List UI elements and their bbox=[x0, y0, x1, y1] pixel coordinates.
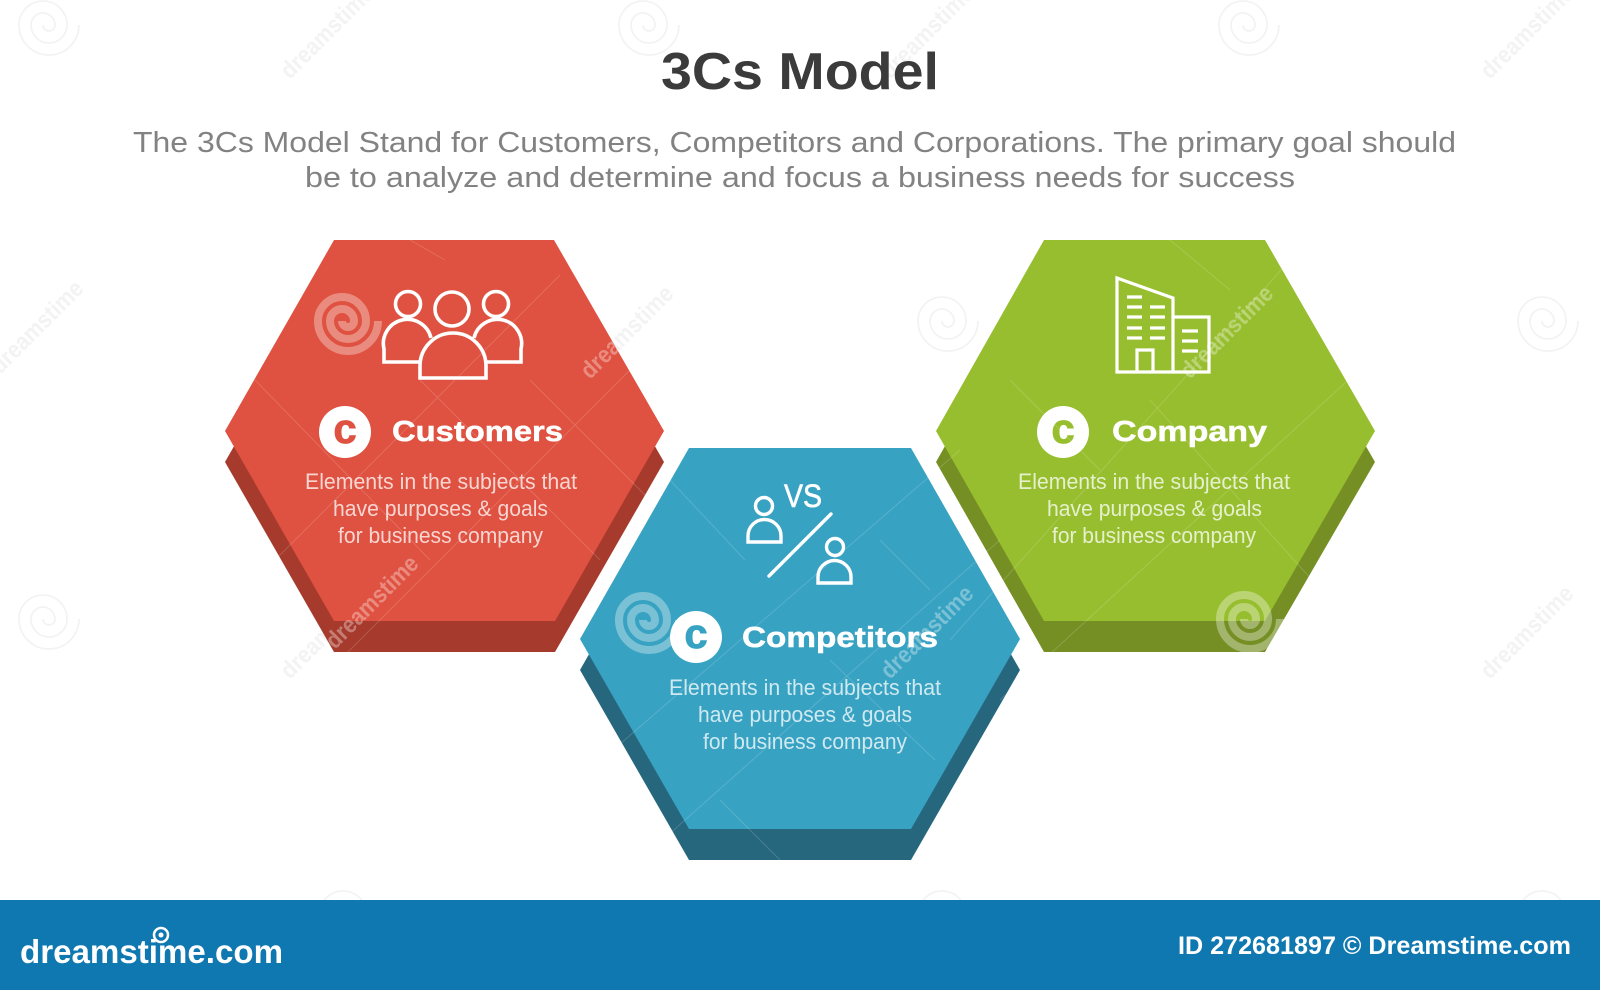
badge: letter C bbox=[670, 610, 722, 663]
watermark overlay on hexagons bbox=[225, 240, 1370, 860]
watermark spirals and marks on hexagons: dreamstime bbox=[1175, 280, 1279, 384]
heading: competitors: Competitors bbox=[742, 622, 938, 654]
watermark spirals and marks on hexagons: dreamstime bbox=[575, 280, 679, 384]
background watermark pattern: dreamstime bbox=[275, 580, 379, 684]
subtitle: The 3Cs Model Stand for Customers, Competitors and Corporations. The primary goal should bbox=[133, 127, 1456, 159]
subtitle: be to analyze and determine and focus a business needs for success bbox=[305, 162, 1295, 194]
title: 3Cs Model bbox=[661, 43, 939, 101]
badge: letter C bbox=[319, 405, 371, 458]
description: competitors bbox=[669, 675, 941, 754]
background watermark pattern: dreamstime bbox=[1475, 580, 1579, 684]
footer banner bbox=[0, 900, 1600, 990]
description: company: have purposes & goals bbox=[1047, 496, 1262, 521]
panel: customers hexagon bbox=[225, 240, 664, 652]
badge: letter C: c bbox=[684, 610, 708, 657]
badge: letter C bbox=[1037, 405, 1089, 458]
badge: letter C: c bbox=[1051, 405, 1075, 452]
footer logo: dreamstime.com bbox=[20, 933, 283, 970]
watermark spirals and marks on hexagons bbox=[318, 280, 1280, 684]
background watermark pattern: dreamstime bbox=[575, 280, 679, 384]
description: competitors: have purposes & goals bbox=[698, 702, 912, 727]
watermark spirals and marks on hexagons: dreamstime bbox=[320, 550, 424, 654]
icon: customers group bbox=[383, 292, 522, 378]
footer image id: ID 272681897 © Dreamstime.com bbox=[1178, 932, 1571, 960]
description: competitors: for business company bbox=[703, 729, 907, 754]
heading: company: Company bbox=[1112, 416, 1267, 448]
hexagon shadow bbox=[936, 271, 1375, 652]
description: customers: Elements in the subjects that bbox=[305, 469, 577, 494]
hexagon face bbox=[580, 448, 1020, 829]
description: company bbox=[1018, 469, 1290, 548]
panel: competitors hexagon bbox=[580, 448, 1020, 860]
hexagon shadow bbox=[225, 271, 664, 652]
description: customers: for business company bbox=[338, 523, 543, 548]
description: competitors: Elements in the subjects that bbox=[669, 675, 941, 700]
panel: company hexagon bbox=[936, 240, 1375, 652]
icon: versus people: VS bbox=[784, 478, 822, 514]
subtitle bbox=[133, 127, 1456, 194]
description: company: for business company bbox=[1052, 523, 1256, 548]
description: company: Elements in the subjects that bbox=[1018, 469, 1290, 494]
icon: office building bbox=[1117, 278, 1209, 372]
hexagon face bbox=[225, 240, 664, 621]
icon: versus people bbox=[748, 478, 851, 583]
description: customers bbox=[305, 469, 577, 548]
watermark spirals and marks on hexagons: dreamstime bbox=[875, 580, 979, 684]
badge: letter C: c bbox=[333, 405, 357, 452]
heading: customers: Customers bbox=[392, 416, 563, 448]
description: customers: have purposes & goals bbox=[333, 496, 548, 521]
hexagon shadow bbox=[580, 479, 1020, 860]
hexagon face bbox=[936, 240, 1375, 621]
